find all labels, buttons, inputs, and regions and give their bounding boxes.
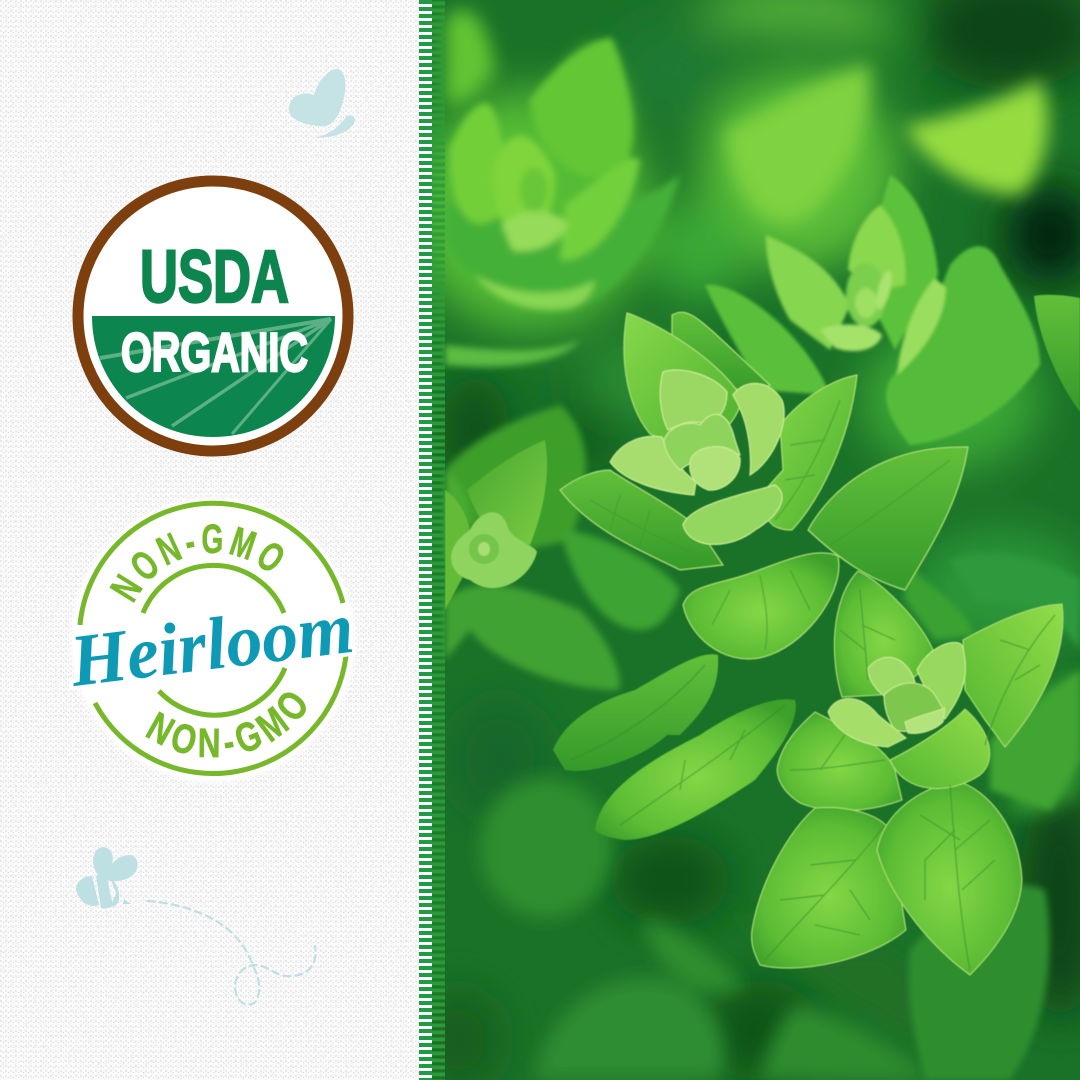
stamp bottom NON-GMO: NON-GMO bbox=[145, 692, 306, 758]
seal green field bbox=[92, 316, 335, 437]
badge: USDA Organic seal bbox=[78, 181, 348, 451]
panel: oregano photo illustration bbox=[410, 0, 1080, 1080]
photo base bbox=[432, 0, 1080, 1080]
in-focus leaf cluster: centre bbox=[560, 312, 968, 659]
stamp script word Heirloom: Heirloom bbox=[65, 587, 358, 703]
in-focus leaf cluster: left bbox=[445, 440, 547, 610]
seal word USDA: USDA bbox=[140, 235, 289, 318]
panel: linen fabric background bbox=[0, 0, 420, 1080]
in-focus far right leaf bbox=[1034, 295, 1080, 412]
semi-focus upper-right cluster bbox=[705, 175, 1040, 445]
stamp rings bbox=[80, 503, 346, 774]
decorative stripe border: inner column bbox=[419, 0, 432, 1080]
centre leaf veins bbox=[590, 400, 950, 650]
lower right veins bbox=[765, 590, 1055, 970]
icon: butterfly bbox=[289, 69, 355, 138]
out-of-focus background foliage bbox=[410, 0, 1080, 1080]
lower right outer leaves bbox=[752, 571, 1063, 975]
stamp white backing bbox=[71, 498, 355, 782]
decorative stripe border: outer column bbox=[432, 0, 445, 1080]
in-focus mid-left leaves bbox=[553, 654, 796, 840]
flight path bbox=[148, 901, 316, 1005]
in-focus leaf cluster: lower right bbox=[752, 571, 1063, 975]
semi-focus top-left cluster bbox=[445, 38, 1080, 1080]
seal ring bbox=[78, 181, 348, 451]
centre bud leaves bbox=[610, 370, 784, 544]
blurred background leaves bbox=[445, 10, 1080, 1080]
stamp top NON-GMO: NON-GMO bbox=[110, 524, 284, 603]
badge: Non-GMO Heirloom stamp bbox=[65, 497, 358, 783]
bee bbox=[76, 847, 138, 909]
lower right rosette bbox=[828, 642, 965, 747]
icon: bee with dashed flight path bbox=[76, 847, 316, 1005]
seal word ORGANIC: ORGANIC bbox=[121, 321, 308, 383]
centre outer leaves bbox=[560, 312, 968, 659]
